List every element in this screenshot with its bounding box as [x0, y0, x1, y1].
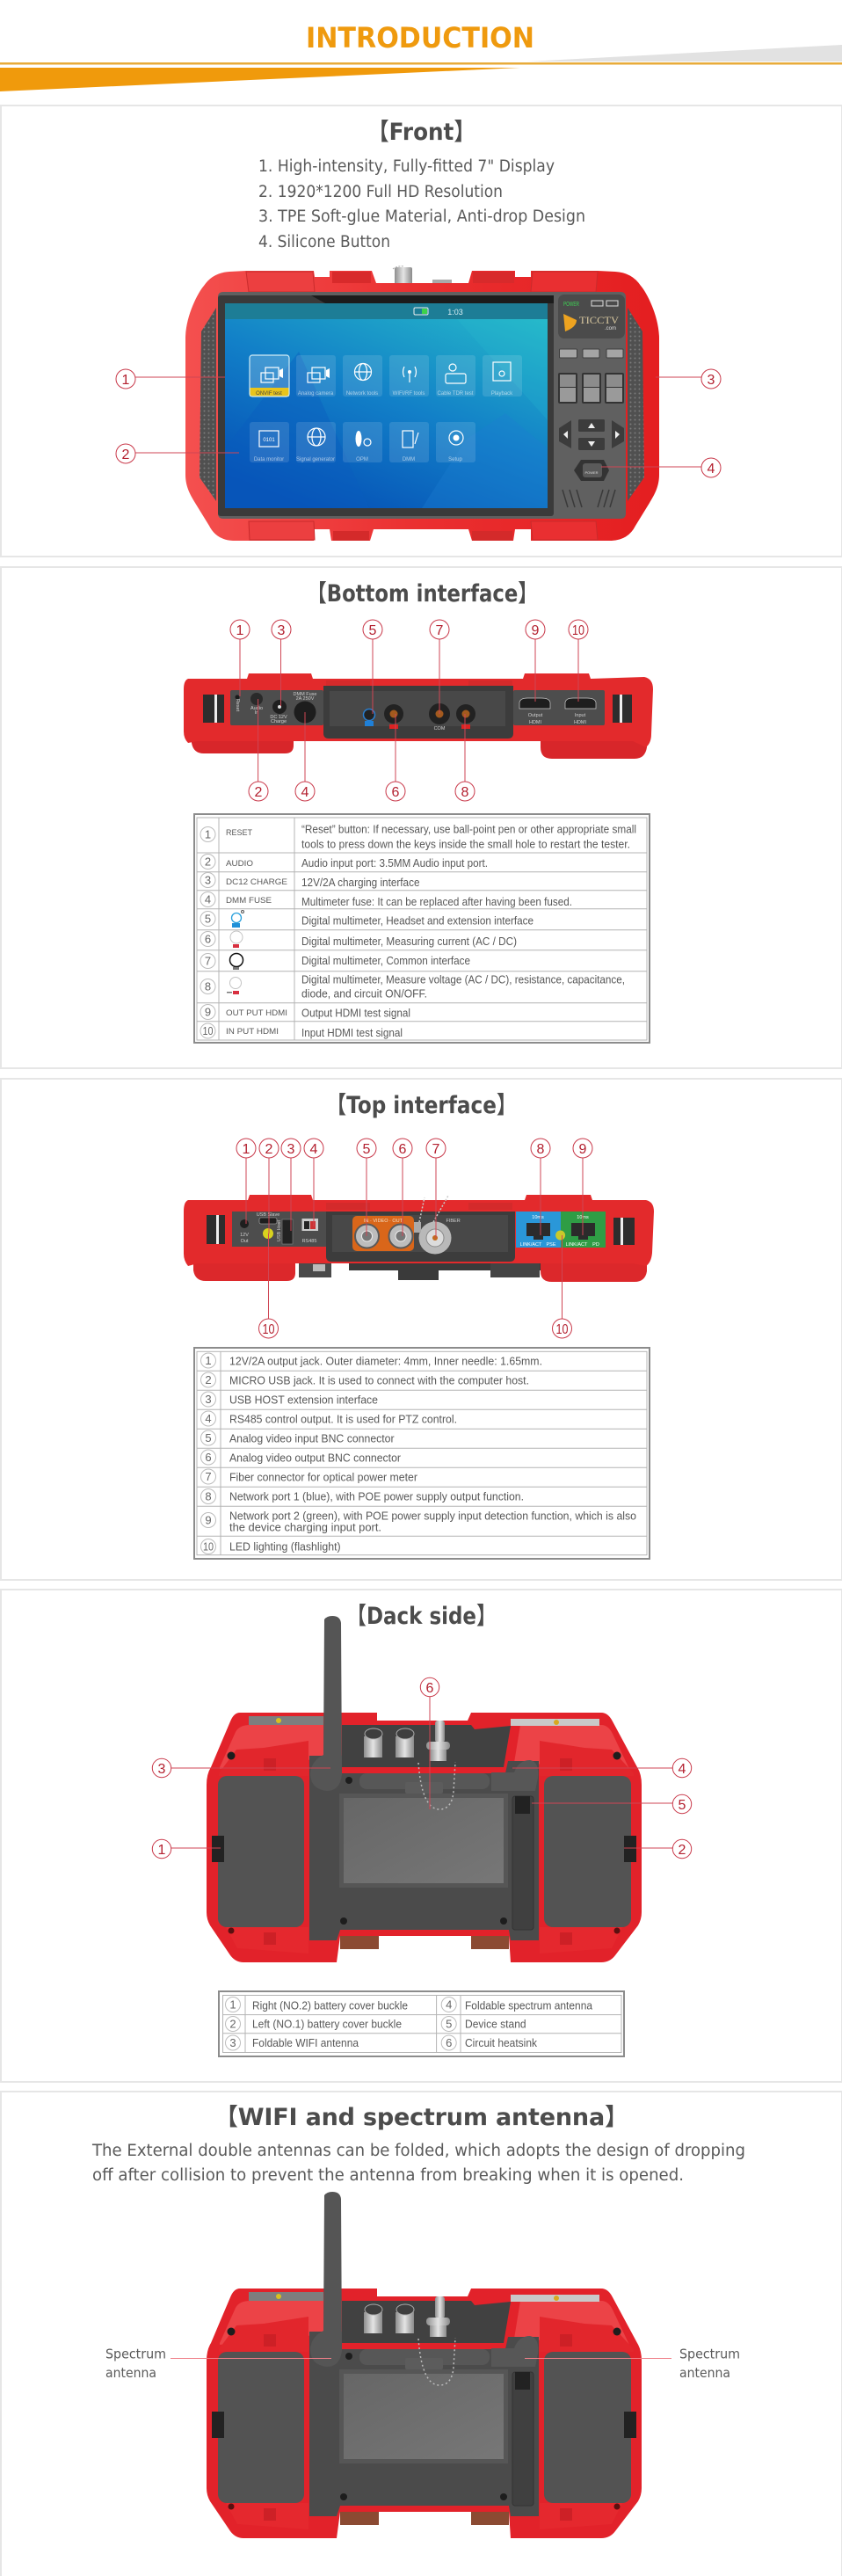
- heading: top interface: 【Top interface】: [326, 1092, 517, 1119]
- row descriptions: Digital multimeter, Measure voltage (AC / DC), resistance, capacitance,: [301, 974, 625, 986]
- row descriptions: tools to press down the keys inside the small hole to restart the tester.: [301, 839, 630, 851]
- callouts: back view: 4: [679, 1762, 686, 1777]
- row numbers: 5: [205, 913, 211, 925]
- banner gold rule: [0, 62, 842, 65]
- row numbers: 1: [229, 1997, 236, 2012]
- description: [91, 2142, 745, 2185]
- row descriptions: Foldable spectrum antenna: [465, 1999, 592, 2012]
- callouts top row: 4: [310, 1142, 318, 1157]
- panel: back side: [1, 1590, 842, 2082]
- callout 3: 3: [708, 373, 715, 388]
- heading: front: 【Front】: [367, 119, 475, 146]
- control panel: [558, 295, 625, 507]
- device: front view: [185, 266, 659, 541]
- device: bottom view: Reset: [235, 699, 240, 712]
- callouts: LED lighting: [258, 1233, 571, 1338]
- device: bottom view: Output: [528, 713, 543, 718]
- title: INTRODUCTION: [306, 21, 534, 55]
- panel: top interface: [1, 1079, 842, 1580]
- description: off after collision to prevent the antenna from breaking when it is opened.: [92, 2166, 684, 2185]
- description: The External double antennas can be folded, which adopts the design of dropping: [91, 2142, 745, 2160]
- app tiles: Analog camera: [298, 391, 334, 397]
- row numbers: 2: [229, 2017, 236, 2031]
- row numbers: 6: [205, 1451, 212, 1464]
- row descriptions: the device charging input port.: [229, 1522, 381, 1534]
- callouts top row: 7: [436, 623, 444, 638]
- feature list: [258, 157, 585, 251]
- row names: DC12 CHARGE: [226, 877, 287, 887]
- logo: [563, 314, 619, 331]
- row descriptions: [301, 823, 636, 1039]
- callout 1: 1: [122, 373, 130, 388]
- device: bottom view: DC 12V: [270, 715, 287, 720]
- device: top view: RS485: [302, 1239, 316, 1244]
- row names: [226, 828, 287, 1037]
- app tiles: DMM: [403, 457, 415, 462]
- callouts top row: 7: [432, 1142, 440, 1157]
- row numbers: 3: [229, 2036, 236, 2049]
- feature list: 1. High-intensity, Fully-fitted 7" Display: [258, 157, 555, 176]
- row descriptions: Digital multimeter, Common interface: [301, 955, 470, 967]
- device: bottom view: COM: [434, 726, 446, 731]
- app tiles: 0101: [263, 438, 275, 443]
- row numbers: 4: [205, 893, 211, 906]
- callout 4: 4: [708, 462, 715, 477]
- row numbers: 2: [205, 855, 211, 869]
- device: bottom view: DMM Fuse: [294, 692, 316, 697]
- device: top view: PSE: [546, 1242, 556, 1248]
- row descriptions: [252, 1999, 592, 2049]
- device: bottom view: Input: [575, 713, 586, 718]
- callouts top row: 9: [579, 1142, 587, 1157]
- app tiles: ONVIF test: [256, 391, 282, 397]
- row descriptions: Input HDMI test signal: [301, 1027, 403, 1039]
- row numbers: 1: [205, 828, 211, 840]
- callout 3: [656, 369, 721, 389]
- row descriptions: 12V/2A output jack. Outer diameter: 4mm, Inner needle: 1.65mm.: [229, 1355, 542, 1367]
- app tiles: Cable TDR test: [438, 391, 474, 397]
- label: left spectrum antenna: [105, 2346, 331, 2381]
- device: bottom view: In: [255, 710, 258, 716]
- row names: DMM FUSE: [226, 896, 272, 906]
- row numbers: 4: [446, 1997, 452, 2012]
- callouts bottom row: 4: [301, 785, 309, 800]
- row descriptions: Digital multimeter, Measuring current (AC / DC): [301, 935, 517, 948]
- callout 2: [116, 444, 239, 463]
- row descriptions: “Reset” button: If necessary, use ball-point pen or other appropriate small: [301, 823, 636, 835]
- callout 2: 2: [122, 448, 130, 462]
- callouts top row: 5: [369, 623, 377, 638]
- device: top view: 10ms: [577, 1215, 589, 1220]
- device: top view: Out: [241, 1239, 249, 1244]
- panel: bottom interface: [1, 567, 842, 1068]
- control panel: POWER: [584, 470, 599, 475]
- row descriptions: Device stand: [465, 2019, 526, 2031]
- row numbers: 8: [205, 979, 211, 993]
- device: top view: 10ms: [532, 1215, 544, 1220]
- callouts: back view: [152, 1677, 692, 1859]
- callouts top row: [236, 1139, 592, 1238]
- app tiles: OPM: [356, 457, 368, 462]
- callouts: back view: 5: [679, 1798, 686, 1813]
- row descriptions: Network port 1 (blue), with POE power supply output function.: [229, 1490, 524, 1503]
- callouts top row: 1: [236, 623, 244, 638]
- row descriptions: Analog video input BNC connector: [229, 1432, 395, 1444]
- row descriptions: [229, 1355, 636, 1553]
- app tiles: Data monitor: [254, 457, 284, 462]
- device: top view: LINK/ACT: [520, 1242, 542, 1248]
- status bar: 1:03: [447, 308, 463, 317]
- app tiles: Network tools: [346, 391, 378, 397]
- callouts top row: 9: [532, 623, 540, 638]
- table: back side: [219, 1991, 624, 2056]
- callouts: LED lighting: 10: [555, 1322, 569, 1337]
- row descriptions: MICRO USB jack. It is used to connect with the computer host.: [229, 1374, 529, 1386]
- callouts: back view: 2: [679, 1843, 686, 1858]
- device: top view: PD: [592, 1242, 599, 1248]
- app tiles: Playback: [491, 391, 513, 397]
- row descriptions: USB HOST extension interface: [229, 1394, 378, 1406]
- label: left spectrum antenna: antenna: [105, 2365, 156, 2381]
- row numbers: 3: [205, 1393, 212, 1406]
- callouts: back view: 3: [158, 1762, 166, 1777]
- row names: RESET: [226, 828, 252, 838]
- device: bottom view: HDMI: [529, 720, 541, 725]
- callouts: back view: 1: [158, 1843, 166, 1858]
- device: bottom view: HDMI: [574, 720, 586, 725]
- heading: wifi and spectrum antenna: 【WIFI and spectrum antenna】: [214, 2104, 628, 2131]
- callouts: back view: 6: [426, 1681, 434, 1696]
- row numbers: 6: [446, 2036, 452, 2049]
- row descriptions: RS485 control output. It is used for PTZ control.: [229, 1413, 457, 1425]
- row descriptions: Network port 2 (green), with POE power supply input detection function, which is also: [229, 1510, 636, 1522]
- heading: back side: 【Dack side】: [346, 1603, 497, 1630]
- device: back view with antennas: [207, 2192, 642, 2538]
- row descriptions: Digital multimeter, Headset and extension interface: [301, 915, 534, 928]
- callouts top row: 5: [363, 1142, 371, 1157]
- table: top interface: [194, 1348, 650, 1559]
- control panel: POWER: [563, 302, 579, 308]
- row descriptions: Multimeter fuse: It can be replaced after having been fused.: [301, 896, 572, 908]
- callout 1: [116, 369, 225, 389]
- row descriptions: Audio input port: 3.5MM Audio input port.: [301, 857, 488, 870]
- row numbers: 10: [203, 1540, 214, 1553]
- label: right spectrum antenna: [525, 2346, 740, 2381]
- table: bottom interface: [194, 814, 650, 1043]
- row numbers: 9: [205, 1006, 211, 1018]
- row descriptions: 12V/2A charging interface: [301, 877, 420, 889]
- row numbers: 9: [205, 1514, 212, 1526]
- callouts top row: 3: [278, 623, 286, 638]
- device: top view: USB Slave: [257, 1212, 279, 1218]
- header banner: [0, 21, 842, 91]
- callout 4: [601, 458, 721, 477]
- row numbers: 1: [205, 1354, 212, 1367]
- row names: IN PUT HDMI: [226, 1027, 279, 1037]
- row numbers: 7: [205, 1470, 212, 1483]
- app tiles: [250, 355, 522, 462]
- banner grey wedge: [527, 45, 842, 62]
- callouts top row: 10: [572, 623, 584, 638]
- heading: bottom interface: 【Bottom interface】: [307, 580, 538, 608]
- row numbers: 4: [205, 1412, 212, 1425]
- callouts top row: 6: [399, 1142, 407, 1157]
- row descriptions: LED lighting (flashlight): [229, 1540, 341, 1553]
- row numbers: 7: [205, 955, 211, 967]
- device: top view: LINK/ACT: [566, 1242, 588, 1248]
- row descriptions: Output HDMI test signal: [301, 1008, 410, 1020]
- label: left spectrum antenna: Spectrum: [105, 2346, 166, 2361]
- row numbers: [200, 826, 215, 1038]
- row numbers: 10: [202, 1024, 213, 1037]
- row names: AUDIO: [226, 859, 253, 869]
- device: bottom view: 2A 250V: [296, 696, 315, 702]
- feature list: 3. TPE Soft-glue Material, Anti-drop Design: [258, 207, 585, 226]
- device: bottom view: Charge: [271, 719, 287, 724]
- row numbers: 5: [205, 1431, 212, 1444]
- row descriptions: Fiber connector for optical power meter: [229, 1471, 417, 1483]
- banner orange wedge: [0, 68, 520, 91]
- app tiles: WIFI/RF tools: [393, 391, 425, 397]
- device: top view: USB Host: [277, 1219, 282, 1241]
- row descriptions: Foldable WIFI antenna: [252, 2037, 359, 2049]
- row descriptions: Circuit heatsink: [465, 2037, 538, 2049]
- callouts top row: 2: [265, 1142, 273, 1157]
- row numbers: 6: [205, 932, 211, 946]
- row numbers: 8: [205, 1489, 212, 1503]
- callouts top row: 3: [287, 1142, 295, 1157]
- panel: wifi and spectrum antenna: [1, 2092, 842, 2576]
- callouts bottom row: 2: [255, 785, 263, 800]
- callouts top row: 1: [243, 1142, 250, 1157]
- label: right spectrum antenna: Spectrum: [679, 2346, 740, 2361]
- panel: front: [1, 106, 842, 557]
- device: bottom view: [184, 673, 653, 759]
- device: bottom view: Audio: [250, 706, 263, 711]
- callouts bottom row: 8: [461, 785, 469, 800]
- row descriptions: Analog video output BNC connector: [229, 1452, 401, 1464]
- row numbers: 2: [205, 1373, 212, 1386]
- device: top view: FIBER: [446, 1219, 461, 1224]
- callouts top row: 8: [537, 1142, 545, 1157]
- row numbers: [200, 1353, 216, 1554]
- device: back view: [207, 1616, 642, 1962]
- callouts: LED lighting: 10: [262, 1322, 275, 1337]
- row numbers: 3: [205, 874, 211, 886]
- row descriptions: diode, and circuit ON/OFF.: [301, 988, 427, 1001]
- callouts top row: [230, 620, 588, 714]
- callouts bottom row: [249, 699, 475, 801]
- callouts bottom row: 6: [392, 785, 400, 800]
- row descriptions: Left (NO.1) battery cover buckle: [252, 2019, 402, 2031]
- screen: [225, 303, 548, 508]
- feature list: 4. Silicone Button: [258, 233, 390, 251]
- feature list: 2. 1920*1200 Full HD Resolution: [258, 183, 503, 201]
- label: right spectrum antenna: antenna: [679, 2365, 730, 2381]
- logo: TICCTV: [579, 314, 619, 326]
- row descriptions: Right (NO.2) battery cover buckle: [252, 1999, 408, 2012]
- row numbers: [225, 1997, 456, 2050]
- device: top view: 12V: [240, 1233, 249, 1238]
- app tiles: Signal generator: [296, 457, 335, 462]
- logo: .com: [605, 326, 616, 331]
- app tiles: Setup: [448, 457, 462, 462]
- device: top view: IN · VIDEO · OUT: [364, 1219, 403, 1224]
- row names: OUT PUT HDMI: [226, 1008, 287, 1018]
- device: top view: [184, 1195, 654, 1282]
- row numbers: 5: [446, 2017, 452, 2031]
